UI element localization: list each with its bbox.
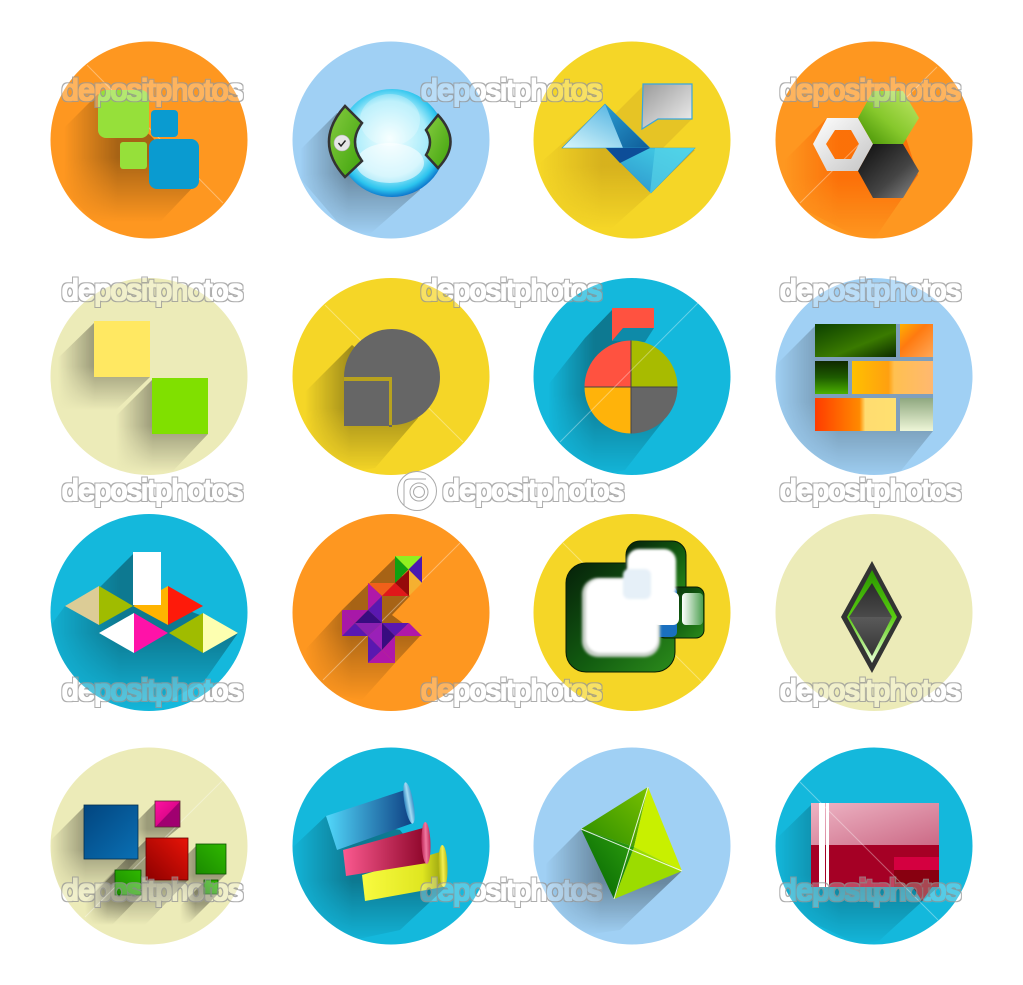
watermarks: depositphotos	[62, 874, 243, 907]
icon: blue folded triangles and speech bubble	[534, 42, 730, 238]
watermarks	[62, 74, 961, 907]
icon: yellow and green squares	[50, 278, 248, 475]
icon: green pyramid	[534, 748, 730, 944]
watermarks: depositphotos	[421, 274, 602, 307]
watermarks: depositphotos	[421, 874, 602, 907]
watermarks: depositphotos	[421, 674, 602, 707]
icon: coloured brick wall	[775, 278, 972, 478]
icon: grey quarter shape with square	[292, 278, 490, 475]
icon: pink and crimson card	[775, 748, 972, 945]
icon: glass sphere with green segments	[292, 42, 490, 238]
watermarks: depositphotos	[62, 274, 243, 307]
icon: scattered squares on cream	[50, 748, 248, 944]
watermarks: depositphotos	[780, 474, 961, 507]
icon: rounded squares on orange	[50, 42, 248, 238]
icon: glossy white rounded squares on green	[534, 514, 730, 711]
icon: three curled paper banners	[290, 748, 490, 945]
icon: dark diamond with green outline	[776, 514, 972, 711]
watermarks: depositphotos	[62, 474, 243, 507]
icon: watermark camera logo	[398, 472, 436, 510]
watermarks: depositphotos	[780, 274, 961, 307]
watermarks: depositphotos	[62, 74, 243, 107]
watermarks: depositphotos	[62, 674, 243, 707]
watermarks: depositphotos	[421, 74, 602, 107]
icon: three hexagons on orange	[776, 42, 972, 238]
icon: flag and four-part pie	[534, 278, 730, 478]
icon: triangles and white bar	[40, 514, 248, 712]
watermarks: depositphotos	[780, 74, 961, 107]
watermarks: depositphotos	[780, 674, 961, 707]
icon: purple origami star	[292, 514, 490, 711]
watermarks: depositphotos	[780, 874, 961, 907]
watermarks: depositphotos	[443, 474, 624, 507]
